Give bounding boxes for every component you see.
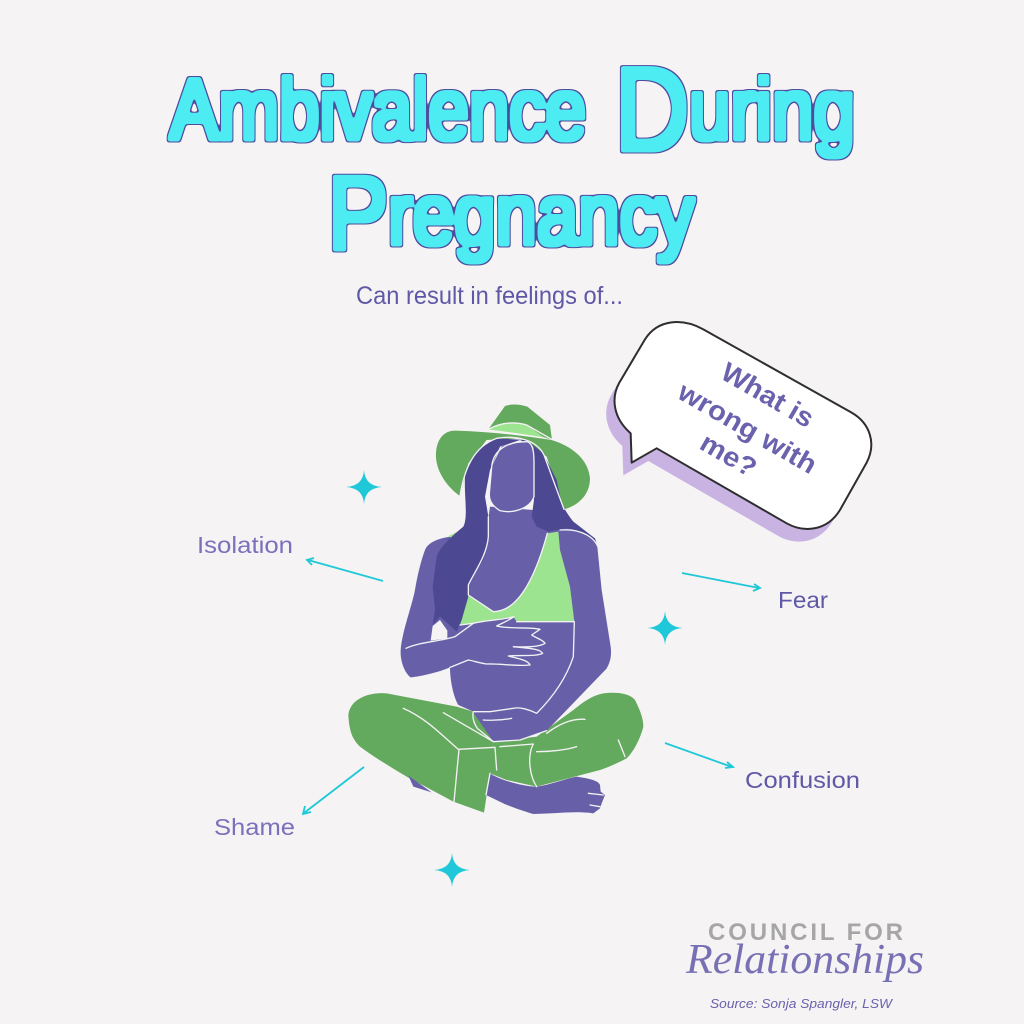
hat — [436, 404, 590, 509]
bubble text: What is — [716, 357, 819, 434]
title — [170, 44, 855, 272]
bubble text: wrong with — [672, 376, 822, 480]
arrow to Fear — [682, 573, 760, 591]
sparkle — [346, 470, 382, 504]
label: Confusion: Confusion — [745, 767, 860, 793]
trousers — [348, 693, 643, 813]
white contour lines — [403, 423, 625, 807]
gap under arm — [431, 620, 447, 641]
hair — [433, 438, 599, 632]
bubble body — [615, 322, 871, 529]
logo: Relationships: Relationships — [685, 937, 924, 983]
title: regnancy — [388, 167, 694, 263]
title: D — [615, 44, 689, 176]
bra — [449, 532, 574, 625]
speech bubble — [606, 322, 871, 542]
arrow to Isolation — [307, 558, 383, 581]
face — [489, 442, 534, 512]
title: uring — [689, 62, 855, 158]
figure: pregnant woman sitting cross-legged — [348, 404, 643, 814]
lower hands — [473, 668, 607, 742]
bubble shadow — [606, 335, 863, 542]
source credit: Source: Sonja Spangler, LSW — [710, 996, 894, 1011]
label: Isolation: Isolation — [197, 532, 293, 558]
feet — [408, 773, 605, 814]
title: Ambivalence — [170, 62, 586, 158]
bubble text: me? — [695, 427, 762, 483]
logo: Council for: COUNCIL FOR — [708, 919, 903, 946]
logo — [685, 919, 924, 983]
subtitle: Can result in feelings of... — [356, 282, 623, 310]
sparkle — [434, 853, 470, 887]
torso and arms — [401, 507, 611, 742]
sparkle — [647, 611, 683, 645]
title: P — [328, 156, 388, 272]
label: Fear: Fear — [778, 587, 828, 613]
arrow to Confusion — [665, 743, 733, 768]
label: Shame: Shame — [214, 814, 295, 840]
arrow to Shame — [303, 767, 364, 814]
